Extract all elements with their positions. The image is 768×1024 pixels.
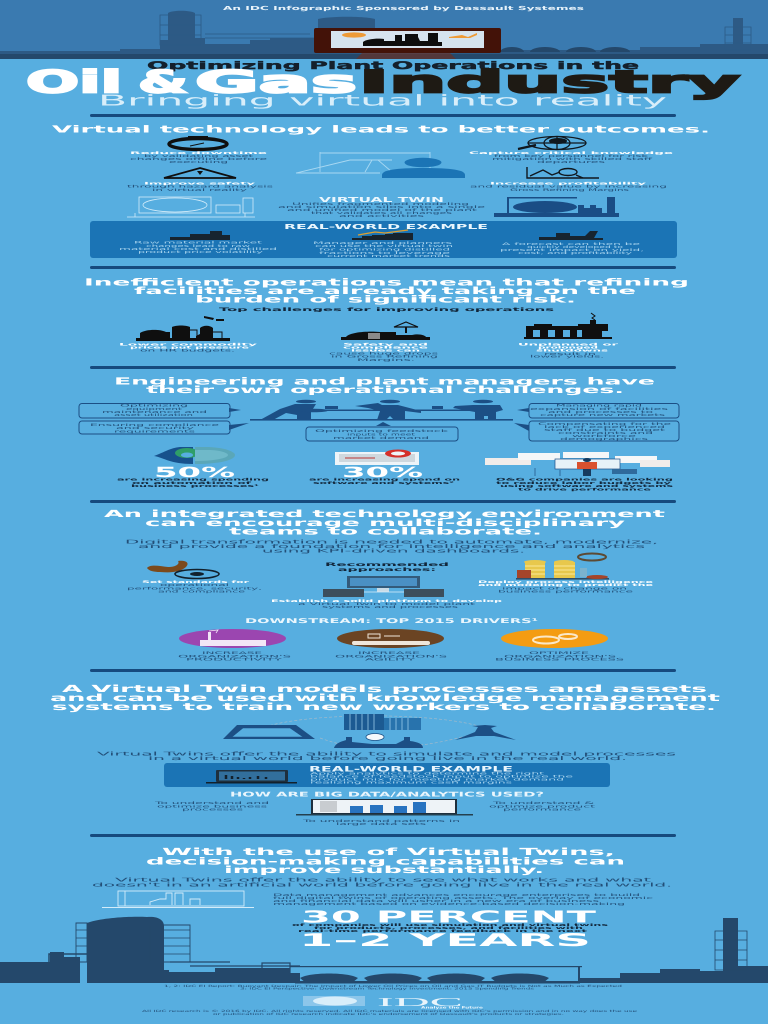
- text: safety and compliance: Margins.: [357, 358, 415, 362]
- text: data management advances: Data management advances encourage enterprises to build: [273, 893, 640, 897]
- illustration: person with virtual plant: [296, 152, 465, 178]
- icon: orange process badge: [501, 629, 608, 648]
- title: oil and gas: [26, 64, 357, 100]
- title: optimizing plant operations: Optimizing Plant Operations in the: [147, 60, 639, 72]
- section heading: decision-making: decision-making capabilities can: [146, 856, 625, 868]
- title: industry: Industry: [359, 64, 740, 100]
- text: virtual twins offer simulate: [97, 752, 677, 762]
- stat: 1-2 years: 1–2 YEARS: [299, 931, 591, 951]
- text: raw material: material cost and distilled: [119, 247, 277, 251]
- text: safety and compliance: cause huge drops: [329, 352, 439, 356]
- text: virtual twins see what works: Virtual Twins offer the ability to see what works and what: [115, 878, 651, 884]
- text: product performance use: [489, 801, 597, 812]
- text: companies use simulation: real-time performance feedback in the next: [298, 929, 588, 933]
- text: business process driver: ORGANIZATION'S: [504, 654, 619, 658]
- icon: globe with magnifier: [518, 136, 586, 150]
- stat: 30 percent: 30 PERCENT: [301, 908, 598, 926]
- callout: compensating for lack of staff: demographics: [560, 437, 649, 441]
- text: deploy process intelligence: impact of change on: [502, 586, 627, 590]
- section heading: virtual twin models: [50, 684, 721, 713]
- text: raw material: Raw material market: [134, 240, 264, 244]
- text: patterns use: [300, 819, 460, 826]
- logo: IDC: IDC: [377, 995, 463, 1009]
- icon: wrench and lock: [147, 561, 219, 578]
- callout: managing rapid expansion: and processes to: [548, 410, 653, 414]
- text: increasing spending: [117, 478, 271, 488]
- text: agility driver: AGILITY: [365, 658, 418, 662]
- text: increasing spending: business processes¹: [131, 484, 260, 488]
- text: reduce downtime: Reduce downtime: [130, 151, 269, 155]
- text: digital transformation: Digital transformation is needed to automate, modernize,: [125, 539, 659, 545]
- section heading: integrated technology: teams to collaborate.: [229, 526, 542, 538]
- callout: optimizing equipment: asset utilization: [114, 413, 193, 417]
- callout: managing rapid expansion: capture new markets: [540, 413, 666, 417]
- text: lower commodity prices: [119, 342, 260, 352]
- section heading: inefficient operations: [84, 278, 689, 306]
- text: safety and compliance: [329, 342, 439, 362]
- section heading: virtual twin models: A Virtual Twin models processes and assets: [62, 684, 707, 695]
- text: raw material: changes lead to raw: [146, 244, 250, 248]
- text: virtual twin: Unifies fragmented modeling: [292, 202, 469, 206]
- callout: ensuring compliance: and security: [116, 426, 194, 430]
- callout: optimizing feedstock: Optimizing feedstock: [315, 429, 451, 433]
- icon: outline tank: [127, 197, 255, 217]
- sponsor line: An IDC Infographic Sponsored by Dassault Systemes: [223, 5, 586, 12]
- callout: compensating for lack of staff: lack of experienced: [544, 425, 665, 429]
- text: capture critical knowledge: [469, 151, 675, 164]
- text: agility driver: [335, 651, 450, 662]
- subheading: recommended approaches: Recommended: [325, 562, 451, 568]
- text: set standards: and compliance: [158, 590, 245, 594]
- text: unplanned shutdowns: result in: [544, 352, 596, 356]
- text: virtual twins offer simulate: in a virtual world before going live in the real world.: [148, 756, 628, 762]
- callout: optimizing equipment: [79, 404, 241, 418]
- text: labor budgets: [496, 478, 675, 491]
- text: improve safety: through hazard analysis: [127, 184, 274, 188]
- text: unplanned shutdowns: shutdowns: [536, 348, 608, 352]
- text: reduce downtime: by validating asset: [144, 154, 255, 158]
- section heading: inefficient operations: facilities are already taking on the: [134, 286, 637, 297]
- text: raw material: [119, 240, 277, 254]
- text: virtual twin: and simulation silos into a single: [278, 205, 485, 209]
- section heading: engineering and plant managers: [114, 376, 656, 396]
- text: deploy process intelligence: and modeling to predict the: [478, 583, 655, 587]
- text: increasing spend: are increasing spend on: [309, 478, 462, 482]
- text: virtual twin: VIRTUAL TWIN: [319, 196, 445, 204]
- text: set standards: Set standards for: [142, 580, 250, 584]
- text: unplanned shutdowns: lower yields.: [530, 354, 604, 358]
- text: establish a solid platform: a Virtual Twin to model plant: [298, 602, 477, 606]
- text: forecast: [500, 242, 644, 255]
- icon: brown agility badge: [337, 629, 444, 648]
- text: virtual twin: and activities: [339, 214, 425, 218]
- text: business processes use: [151, 801, 269, 812]
- icon: screen with red gear: [335, 450, 419, 465]
- text: raw material: product price volatility: [138, 250, 263, 254]
- text: agility driver: INCREASE: [358, 651, 420, 655]
- text: capture critical knowledge: mitigation with skilled staff: [492, 157, 654, 161]
- text: virtual twin: and unified model of the plant: [287, 208, 479, 212]
- section heading: engineering and plant managers: their own operational challenges.: [146, 385, 624, 396]
- text: reduce downtime: executing: [169, 160, 228, 164]
- callout: ensuring compliance: requirements: [114, 430, 196, 434]
- illustration: three workers at conveyor: [250, 400, 513, 421]
- illustration: training network: [223, 714, 516, 748]
- text: improve safety: Improve safety: [144, 182, 258, 186]
- text: virtual twin: [278, 196, 485, 218]
- icon: refinery: [136, 316, 230, 341]
- text: business processes use: optimize business: [157, 804, 268, 808]
- text: unplanned shutdowns: prolonged: [538, 346, 599, 350]
- section heading: virtual technology: Virtual technology leads to better outcomes.: [52, 124, 710, 136]
- text: patterns use: large data sets: [336, 822, 427, 826]
- text: lower commodity prices: on HR budgets.: [140, 348, 235, 352]
- callout: optimizing equipment: equipment: [126, 407, 184, 411]
- title: oil and gas: &: [138, 64, 188, 100]
- text: labor budgets: to drive performance: [518, 487, 653, 491]
- icon: forklift: [539, 231, 603, 240]
- text: unplanned shutdowns: [518, 342, 619, 358]
- text: safety and compliance: Safety and: [343, 342, 430, 346]
- callout: optimizing equipment: maintenance and: [102, 410, 207, 414]
- text: managers and planners: for optimizing distilled: [319, 248, 450, 252]
- icon: monitor with refinery: [314, 28, 501, 59]
- text: apply analytics: [310, 772, 573, 784]
- text: productivity driver: ORGANIZATION'S: [178, 654, 294, 658]
- icon: half brain half circuit: [154, 447, 235, 464]
- icon: train: [170, 231, 230, 240]
- icon: dark tank: [494, 197, 619, 217]
- text: copyright: All IDC research is © 2016 by IDC. All rights reserved. All IDC materials are licensed with IDC's permission and in no way does the use: [142, 1009, 637, 1013]
- icon: laptop with bars: [206, 770, 297, 784]
- section heading: integrated technology: An integrated technology environment: [104, 509, 666, 520]
- text: data management advances: full digital twins of operating assets. The overlay of economic: [273, 896, 653, 900]
- text: labor budgets: using software and systems: [500, 484, 673, 488]
- text: business processes use: To understand and: [151, 801, 269, 805]
- text: managers and planners: [313, 241, 453, 258]
- text: labor budgets: O&G companies are looking: [496, 478, 675, 482]
- text: establish a solid platform: systems and processes: [322, 605, 459, 609]
- callout: compensating for lack of staff: workforce: [572, 434, 636, 438]
- text: capture critical knowledge: departures: [537, 160, 606, 164]
- section heading: virtual twin models: systems to train new workers to collaborate.: [52, 702, 716, 713]
- callout: ensuring compliance: Ensuring compliance: [90, 423, 219, 427]
- stat: 30 percent: 30%: [342, 465, 423, 481]
- text: business process driver: OPTIMIZE: [529, 651, 589, 655]
- text: product performance use: To understand &: [489, 801, 595, 805]
- subheading: top challenges: Top challenges for improving operations: [219, 307, 554, 313]
- text: deploy process intelligence: Deploy process intelligence: [478, 580, 655, 584]
- text: footnotes: 1, 2: IDC EI Report: Buoyant Despair: The Impact of Lower Oil Prices on Oil and Gas IT Budgets is Not as Much as Expected: [164, 984, 622, 988]
- text: business processes use: processes: [182, 808, 244, 812]
- text: improve safety: in virtual reality: [152, 188, 247, 192]
- text: apply analytics: product mix for meeting market demand: [310, 777, 564, 781]
- text: capture critical knowledge: Capture critical knowledge: [469, 151, 675, 155]
- text: increasing spend: software and systems²: [313, 481, 455, 485]
- callout: optimizing feedstock: [306, 422, 458, 441]
- text: set standards: [127, 580, 262, 594]
- text: lower commodity prices: prices put pressure: [130, 346, 251, 350]
- text: companies use simulation: of companies will use simulation and virtual twins: [292, 923, 608, 927]
- icon: growth chart: [352, 230, 413, 240]
- text: business process driver: [495, 651, 627, 662]
- text: safety and compliance: compliance: [343, 346, 430, 350]
- callout: optimizing feedstock: inputs to meet: [347, 432, 417, 436]
- text: forecast: present impact on yield,: [500, 248, 644, 252]
- text: reduce downtime: changes offline before: [130, 157, 267, 161]
- text: digital transformation: and provide a foundation for intelligence and analytics: [138, 544, 646, 550]
- text: increasing spending: are increasing spending: [117, 478, 271, 482]
- logo: IDC: Analyze the Future: [421, 1006, 483, 1010]
- callout: managing rapid expansion: Managing rapid: [556, 404, 642, 408]
- callout: managing rapid expansion: expansion of facilities: [530, 407, 669, 411]
- text: forecast: A forecast can then be: [502, 242, 640, 246]
- callout: optimizing feedstock: market demand: [333, 436, 429, 440]
- section heading: integrated technology: can encourage multi-disciplinary: [145, 518, 627, 529]
- section heading: inefficient operations: Inefficient operations mean that refining: [84, 278, 689, 288]
- icon: safety plant: [341, 322, 430, 340]
- callout: ensuring compliance: [79, 421, 249, 434]
- panel: real-world example: [90, 221, 677, 258]
- text: set standards: performance, security,: [127, 586, 262, 590]
- text: virtual twins see what works: [92, 878, 673, 888]
- text: increase profitability: Gross Refining Margins: [510, 188, 629, 192]
- text: copyright: or publication of IDC research indicate IDC's endorsement of Dassault's products or strategies.: [213, 1012, 564, 1016]
- callout: managing rapid expansion: [517, 404, 679, 418]
- text: data management advances: [273, 893, 653, 906]
- text: deploy process intelligence: [478, 580, 655, 594]
- text: productivity driver: INCREASE: [202, 651, 262, 655]
- text: companies use simulation: [292, 923, 608, 933]
- text: patterns use: To understand patterns in: [300, 819, 460, 823]
- icon: laptop with bar chart: [296, 799, 473, 816]
- footer skyline: [0, 917, 768, 984]
- stat: 50 percent: 50%: [154, 465, 235, 481]
- text: managers and planners: can use the virtual twin: [315, 244, 453, 248]
- text: virtual twins offer simulate: Virtual Twins offer the ability to simulate and model processes: [97, 752, 677, 758]
- text: managers and planners: Manager and planners: [313, 241, 453, 245]
- text: increasing spend: [309, 478, 462, 485]
- text: reduce downtime: [130, 151, 269, 164]
- text: virtual twins see what works: doesn't in an artificial world before going live in the real world.: [92, 882, 673, 888]
- text: business process driver: BUSINESS PROCESS: [495, 658, 627, 662]
- text: productivity driver: PRODUCTIVITY: [186, 658, 285, 662]
- text: apply analytics: Apply analytics to determine the right: [310, 772, 546, 776]
- section heading: virtual twin models: and can be used with knowledge management: [50, 693, 721, 704]
- text: set standards: operational: [160, 583, 229, 587]
- text: productivity driver: [178, 651, 294, 662]
- text: product performance use: optimize product: [489, 804, 597, 808]
- text: footnotes: [164, 984, 622, 990]
- section heading: decision-making: [146, 847, 625, 876]
- text: apply analytics: realizing maximum cash margins: [310, 780, 513, 784]
- text: forecast: quickly developed to: [527, 245, 623, 249]
- section heading: decision-making: With the use of Virtual Twins,: [162, 847, 615, 858]
- text: unplanned shutdowns: Unplanned or: [518, 342, 619, 346]
- section heading: engineering and plant managers: Engineering and plant managers have: [114, 376, 656, 388]
- section heading: inefficient operations: burden of significant risk.: [195, 294, 576, 306]
- text: apply analytics: balance of feedstock input to optimize the: [310, 774, 573, 778]
- section heading: decision-making: improve substantially.: [224, 865, 544, 876]
- text: establish a solid platform: [271, 599, 504, 609]
- callout: compensating for lack of staff: staff due to budget: [544, 428, 667, 432]
- section heading: integrated technology: [104, 509, 666, 538]
- subheading: recommended approaches: [325, 562, 451, 573]
- text: virtual twin: that validates all changes: [311, 211, 453, 215]
- icon: chart with magnifier: [527, 167, 599, 178]
- icon: silos and gear: [516, 554, 609, 580]
- text: safety and compliance: issues can: [351, 348, 422, 352]
- callout: compensating for lack of staff: constraints and: [558, 431, 653, 435]
- text: managers and planners: fractions to leverage: [319, 251, 450, 255]
- text: managers and planners: current market trends: [327, 254, 451, 258]
- text: product performance use: performance: [503, 808, 581, 812]
- text: lower commodity prices: Lower commodity: [119, 342, 260, 346]
- text: deploy process intelligence: business performance: [498, 590, 633, 594]
- text: agility driver: ORGANIZATION'S: [335, 654, 450, 658]
- subheading: big data analytics: HOW ARE BIG DATA/ANALYTICS USED?: [230, 790, 544, 798]
- text: increasing spending: on automation of: [132, 481, 253, 485]
- panel: real-world example two: [164, 763, 610, 787]
- icon: warning triangle: [164, 168, 236, 178]
- subheading: recommended approaches: approaches:: [338, 567, 436, 573]
- title: oil and gas: Oil: [26, 64, 122, 100]
- text: data management advances: management based on evidence-based decision-making: [273, 902, 625, 906]
- text: copyright: [142, 1009, 637, 1016]
- icon: stopwatch: [169, 136, 227, 150]
- text: companies use simulation: for products, processes, and facilities with: [314, 926, 585, 930]
- panel heading: REAL-WORLD EXAMPLE: [284, 223, 489, 231]
- icon: worker surrounded by screens: [485, 452, 670, 476]
- text: data management advances: and financial data will usher in a new era of business: [273, 899, 600, 903]
- text: increase profitability: [470, 182, 667, 192]
- icon: shutdown plant: [524, 313, 612, 339]
- text: digital transformation: [125, 539, 659, 554]
- text: labor budgets: to reduce labor budgets by: [496, 481, 673, 485]
- text: safety and compliance: in Gross Refining: [331, 354, 438, 358]
- icon: purple productivity badge: [179, 629, 286, 648]
- subtitle: Bringing virtual into reality: [98, 92, 667, 110]
- logo: IDC: [303, 995, 483, 1010]
- callout: compensating for lack of staff: Compensating for the: [538, 422, 671, 426]
- title: oil and gas: Gas: [195, 64, 357, 100]
- text: capture critical knowledge: from key personnel for risk: [494, 154, 651, 158]
- text: footnotes: 3: IDC EI Perspective: Downstream Technology Investment: 2015 Spending Trends: [240, 986, 535, 990]
- icon: outline laptop: [102, 891, 254, 908]
- text: increase profitability: and residual value by increasing: [470, 184, 667, 188]
- text: establish a solid platform: Establish a solid platform to develop: [271, 599, 504, 603]
- subheading: downstream drivers: DOWNSTREAM: TOP 2015 DRIVERS¹: [245, 617, 538, 625]
- text: digital transformation: using KPI-driven dashboards.: [262, 548, 526, 554]
- panel heading: REAL-WORLD EXAMPLE: [309, 764, 513, 774]
- text: increase profitability: Increase profitability: [490, 182, 649, 186]
- text: improve safety: [127, 182, 274, 192]
- text: forecast: cost, and profitability: [518, 251, 632, 255]
- icon: monitor and servers: [323, 576, 444, 597]
- callout: compensating for lack of staff: [514, 421, 679, 441]
- header band with skyline: [0, 0, 768, 59]
- callout: optimizing equipment: Optimizing: [120, 404, 188, 408]
